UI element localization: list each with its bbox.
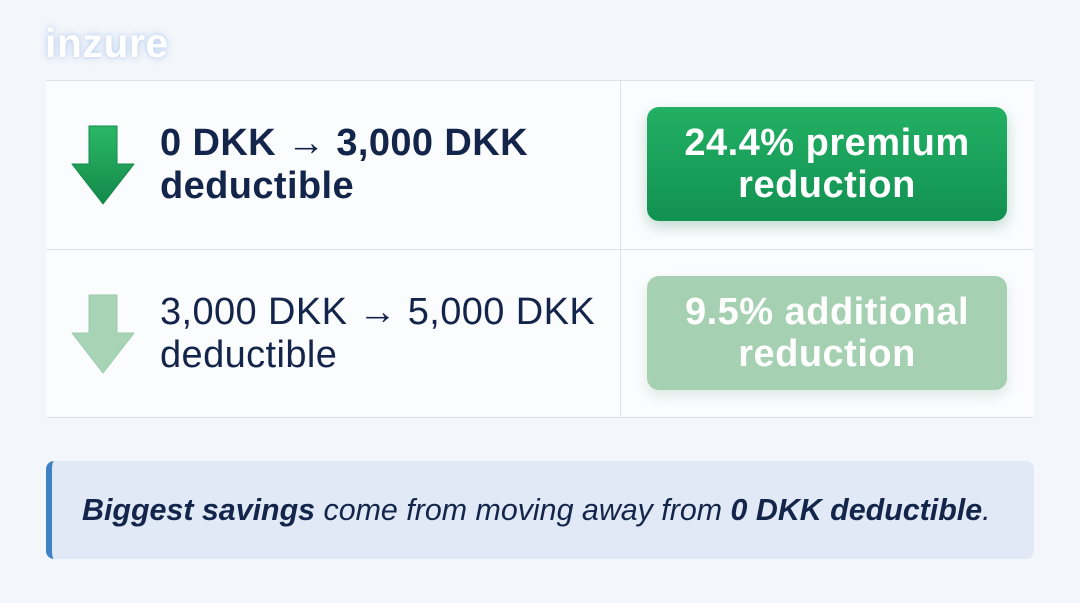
- callout: [46, 461, 1034, 559]
- text: row 2: 3,000 DKK → 5,000 DKK: [160, 291, 595, 333]
- icon: light green down arrow: [72, 294, 134, 374]
- text: row 1: deductible: [160, 165, 354, 207]
- badge: 24.4%: 24.4% premium: [684, 122, 970, 164]
- logo: inzure: [45, 20, 169, 66]
- badge: 24.4%: [647, 107, 1007, 221]
- badge: 9.5%: reduction: [738, 333, 916, 375]
- text: row 1: [160, 122, 528, 207]
- icon: green down arrow: [72, 126, 134, 204]
- text: row 2: deductible: [160, 334, 337, 376]
- text: row 2: [160, 291, 595, 376]
- badge: 9.5%: 9.5% additional: [685, 291, 969, 333]
- table panel: [46, 80, 1034, 418]
- badge: 9.5%: [647, 276, 1007, 390]
- badge: 24.4%: reduction: [738, 164, 916, 206]
- text: row 1: 0 DKK → 3,000 DKK: [160, 122, 528, 164]
- callout text: Biggest savings come from moving away from 0 DKK deductible.: [82, 493, 991, 527]
